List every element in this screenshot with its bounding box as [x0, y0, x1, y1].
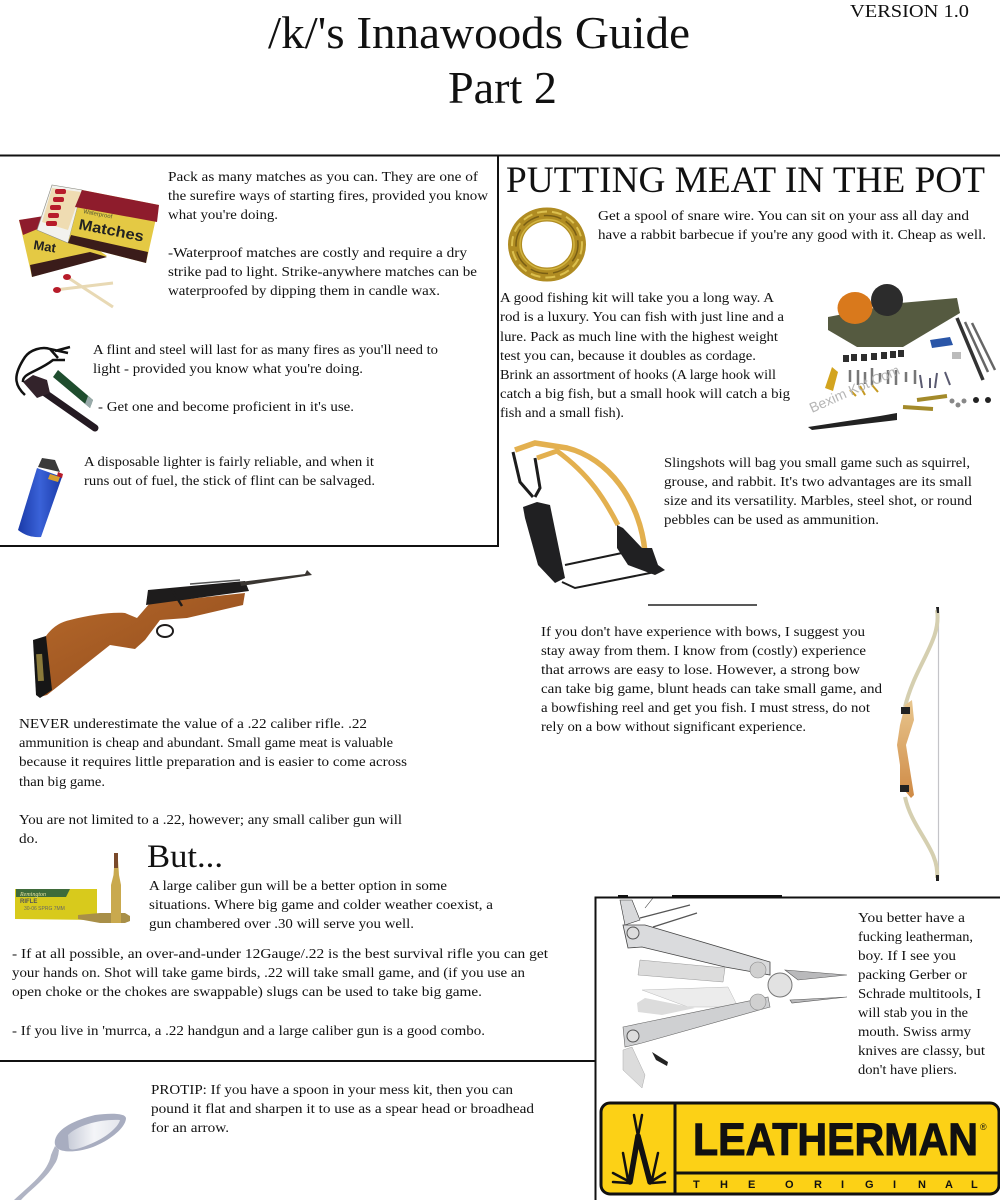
- text: matches: Pack as many matches as you can. They are one of: [168, 170, 478, 185]
- text: over-and-under: - If at all possible, an over-and-under 12Gauge/.22 is the best survival rifle you can get: [12, 947, 548, 962]
- title: /k/'s Innawoods Guide: [268, 7, 690, 58]
- logo: leatherman: [601, 1103, 999, 1194]
- icon: air rifle: [33, 570, 312, 698]
- text: protip: PROTIP: If you have a spoon in your mess kit, then you can: [151, 1083, 513, 1098]
- icon: matches: [19, 185, 159, 307]
- text: protip: pound it flat and sharpen it to use as a spear head or broadhead: [151, 1102, 534, 1117]
- text: bow: can take big game, blunt heads can take small game, and: [541, 682, 882, 697]
- logo tagline: T: [693, 1179, 700, 1191]
- text: over-and-under: [12, 947, 548, 1039]
- text: slingshot: Slingshots will bag you small game such as squirrel,: [664, 456, 970, 471]
- text: flint and steel: A flint and steel will last for as many fires as you'll need to: [93, 343, 438, 358]
- text: bow: a bowfishing reel and get you fish. I must stress, do not: [541, 701, 870, 716]
- text: flint and steel: [93, 343, 438, 415]
- logo tagline: E: [748, 1179, 755, 1191]
- text: matches: the surefire ways of starting fires, provided you know: [168, 189, 489, 204]
- text: flint and steel: light - provided you know what you're doing.: [93, 362, 363, 377]
- text: leatherman: You better have a: [858, 911, 966, 926]
- icon: spoon: [14, 1114, 126, 1200]
- text: fishing kit: test you can, because it doubles as cordage.: [500, 349, 756, 364]
- text: bow: If you don't have experience with bows, I suggest you: [541, 625, 865, 640]
- text: bow: that arrows are easy to lose. However, a strong bow: [541, 663, 861, 678]
- panel: fire starting: [16, 170, 489, 537]
- icon: matches: Matches: [77, 216, 145, 246]
- panel: leatherman: [601, 898, 999, 1194]
- text: large caliber: A large caliber gun will be a better option in some: [149, 879, 447, 894]
- text: lighter: runs out of fuel, the stick of flint can be salvaged.: [84, 474, 375, 489]
- text: bow: [541, 625, 882, 735]
- text: fishing kit: [500, 291, 790, 421]
- logo tagline: I: [893, 1179, 896, 1191]
- text: large caliber: [149, 879, 494, 932]
- text: leatherman: Schrade multitools, I: [858, 987, 981, 1002]
- logo tagline: [693, 1179, 978, 1191]
- text: matches: strike pad to light. Strike-anywhere matches can be: [168, 265, 477, 280]
- icon: flint and steel: [16, 347, 95, 428]
- icon: recurve bow: [897, 607, 939, 881]
- text: fishing kit: Brink an assortment of hooks (A large hook will: [500, 368, 776, 383]
- text: fishing kit: fish and a small fish).: [500, 406, 624, 421]
- logo tagline: H: [720, 1179, 728, 1191]
- text: slingshot: pebbles can be used as ammunition.: [664, 513, 879, 528]
- text: flint and steel: - Get one and become proficient in it's use.: [98, 400, 354, 415]
- logo tagline: L: [971, 1179, 978, 1191]
- text: fishing kit: lure. Pack as much line with the highest weight: [500, 330, 778, 345]
- text: matches: [168, 170, 489, 299]
- heading: PUTTING MEAT IN THE POT: [506, 160, 985, 201]
- text: leatherman: mouth. Swiss army: [858, 1025, 971, 1040]
- text: lighter: A disposable lighter is fairly reliable, and when it: [84, 455, 374, 470]
- logo wordmark: LEATHERMAN: [693, 1114, 978, 1165]
- text: large caliber: gun chambered over .30 will serve you well.: [149, 917, 414, 932]
- panel: protip: [14, 1083, 534, 1200]
- icon: fishing kit: [807, 284, 995, 430]
- text: .22 rifle: do.: [19, 832, 38, 847]
- icon: multitool: [620, 898, 847, 1088]
- logo tagline: O: [785, 1179, 794, 1191]
- logo mark: pliers: [613, 1115, 665, 1183]
- text: slingshot: size and its versatility. Marbles, steel shot, or round: [664, 494, 972, 509]
- heading: but: But...: [147, 839, 223, 875]
- icon: fishing kit: Bexim Kot.Com: [807, 362, 902, 416]
- logo tagline: N: [918, 1179, 926, 1191]
- text: .22 rifle: [19, 717, 407, 847]
- text: slingshot: [664, 456, 972, 528]
- text: slingshot: grouse, and rabbit. It's two advantages are its small: [664, 475, 972, 490]
- text: large caliber: situations. Where big game and colder weather coexist, a: [149, 898, 494, 913]
- icon: lighter: [18, 458, 63, 537]
- logo tagline: I: [841, 1179, 844, 1191]
- icon: ammunition: Remington: [19, 892, 46, 898]
- text: .22 rifle: than big game.: [19, 775, 105, 790]
- logo tagline: A: [945, 1179, 953, 1191]
- icon: slingshot: [513, 443, 665, 588]
- panel: putting meat in the pot: [500, 160, 995, 881]
- text: leatherman: knives are classy, but: [858, 1044, 985, 1059]
- text: over-and-under: open choke or the chokes are swappable) slugs can be used to take big game.: [12, 985, 482, 1000]
- text: .22 rifle: because it requires little preparation and is easier to come across: [19, 755, 407, 770]
- text: protip: for an arrow.: [151, 1121, 229, 1136]
- text: protip: [151, 1083, 534, 1136]
- version label: VERSION 1.0: [850, 1, 969, 21]
- text: .22 rifle: NEVER underestimate the value of a .22 caliber rifle. .22: [19, 717, 367, 732]
- text: leatherman: will stab you in the: [858, 1006, 968, 1021]
- text: leatherman: don't have pliers.: [858, 1063, 957, 1078]
- title: Part 2: [448, 62, 557, 113]
- icon: matches: Waterproof: [83, 209, 113, 221]
- text: leatherman: boy. If I see you: [858, 949, 956, 964]
- panel: rifles: [12, 570, 548, 1039]
- text: .22 rifle: ammunition is cheap and abundant. Small game meat is valuable: [19, 736, 393, 751]
- logo tagline: R: [814, 1179, 822, 1191]
- text: bow: stay away from them. I know from (costly) experience: [541, 644, 866, 659]
- icon: snare wire: [512, 212, 582, 278]
- text: over-and-under: your hands on. Shot will take game birds, .22 will take small game, and (if you use an: [12, 966, 525, 981]
- text: .22 rifle: You are not limited to a .22, however; any small caliber gun will: [19, 813, 402, 828]
- text: matches: -Waterproof matches are costly and require a dry: [168, 246, 467, 261]
- text: snare wire: have a rabbit barbecue if you're any good with it. Cheap as well.: [598, 228, 986, 243]
- text: leatherman: fucking leatherman,: [858, 930, 973, 945]
- text: matches: what you're doing.: [168, 208, 278, 223]
- text: matches: waterproofed by dipping them in candle wax.: [168, 284, 440, 299]
- registered mark: ®: [980, 1122, 987, 1132]
- text: snare wire: [598, 209, 986, 243]
- text: fishing kit: catch a big fish, but a small hook will catch a big: [500, 387, 790, 402]
- text: leatherman: packing Gerber or: [858, 968, 967, 983]
- icon: ammunition: 30-06 SPRG 7MM: [24, 906, 65, 912]
- logo tagline: G: [865, 1179, 874, 1191]
- text: over-and-under: - If you live in 'murrca, a .22 handgun and a large caliber gun is a good combo.: [12, 1024, 485, 1039]
- text: lighter: [84, 455, 375, 489]
- text: bow: rely on a bow without significant experience.: [541, 720, 806, 735]
- text: fishing kit: A good fishing kit will take you a long way. A: [500, 291, 775, 306]
- text: fishing kit: rod is a luxury. You can fish with just line and a: [500, 310, 785, 325]
- icon: matches: Mat: [33, 237, 58, 256]
- title: [268, 7, 690, 113]
- text: snare wire: Get a spool of snare wire. You can sit on your ass all day and: [598, 209, 969, 224]
- text: leatherman: [858, 911, 985, 1078]
- icon: ammunition: [15, 853, 130, 923]
- icon: ammunition: RIFLE: [20, 899, 37, 905]
